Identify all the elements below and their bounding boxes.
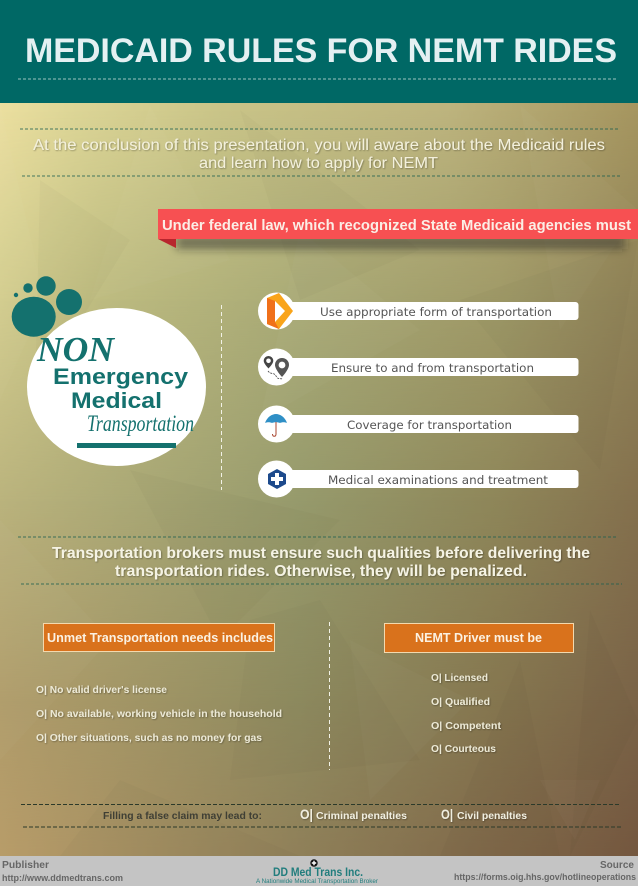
brokers statement: transportation rides. Otherwise, they will be penalized. [115,563,527,580]
footer: http://www.ddmedtrans.com [2,873,123,883]
title: MEDICAID RULES FOR NEMT RIDES [25,32,617,70]
decorative teal blobs [12,276,82,337]
requirement 2: Ensure to and from transportation [331,361,534,375]
list: driver qualities: O| Competent [431,720,502,732]
requirement 2 [258,348,578,386]
false claim penalties [103,807,527,822]
logo circle: Non Emergency Medical Transportation: NON [36,330,116,369]
orange box: unmet needs: Unmet Transportation needs includes [47,630,273,645]
orange box: driver [384,624,574,652]
icon: map pins [264,356,289,379]
intro text [33,137,605,172]
false claim penalties: O| [441,807,453,822]
false claim penalties: Criminal penalties [316,810,407,822]
header band [0,0,638,103]
icon: logo cross [310,859,318,867]
footer [0,856,638,887]
logo circle: Non Emergency Medical Transportation: Transportation [87,411,194,436]
orange box: unmet needs [44,624,274,652]
red ribbon: Under federal law, which recognized State Medicaid agencies must [162,217,631,234]
intro text: At the conclusion of this presentation, you will aware about the Medicaid rules [33,137,605,154]
list: unmet needs [36,684,282,744]
logo circle: Non Emergency Medical Transportation: Medical [71,388,162,413]
list: unmet needs: O| Other situations, such as no money for gas [36,732,262,744]
list: unmet needs: O| No available, working vehicle in the household [36,708,282,720]
red ribbon [158,209,638,249]
logo circle: Non Emergency Medical Transportation: Emergency [53,364,189,389]
list: driver qualities: O| Licensed [431,672,488,684]
logo circle: Non Emergency Medical Transportation [27,308,206,466]
requirement 4: Medical examinations and treatment [328,473,548,487]
list: driver qualities: O| Qualified [431,696,490,708]
footer: https://forms.oig.hhs.gov/hotlineoperations [454,872,636,882]
brokers statement [52,545,590,580]
false claim penalties: O| [300,807,313,822]
list: unmet needs: O| No valid driver's license [36,684,167,696]
false claim penalties: Civil penalties [457,810,527,822]
icon: play arrow [267,293,293,329]
brokers statement: Transportation brokers must ensure such qualities before delivering the [52,545,590,562]
footer: Source [600,859,634,871]
broker logo text: DD Med Trans Inc. [273,867,363,879]
requirement 4 [258,460,578,498]
orange box: driver: NEMT Driver must be [415,630,542,645]
requirement 1: Use appropriate form of transportation [320,305,552,319]
requirement 3 [258,406,578,442]
footer: Publisher [2,859,49,871]
false claim penalties: Filling a false claim may lead to: [103,810,262,822]
intro text: and learn how to apply for NEMT [199,155,439,172]
broker logo text [256,867,378,885]
list: driver qualities [431,672,502,755]
requirement 1 [258,292,578,330]
list: driver qualities: O| Courteous [431,743,496,755]
broker logo text: A Nationwide Medical Transportation Broker [256,879,378,885]
requirement 3: Coverage for transportation [347,418,512,432]
icon: medical cross [268,469,286,489]
icon: umbrella [265,414,287,436]
